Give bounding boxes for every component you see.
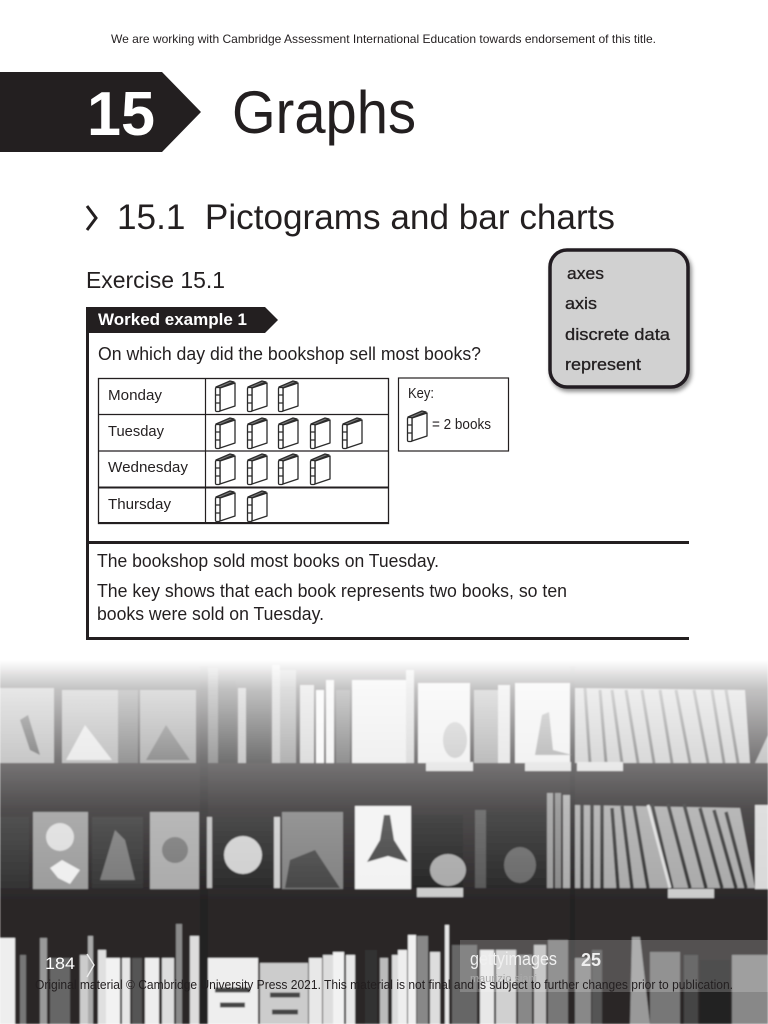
- chapter banner: [0, 72, 201, 152]
- worked example frame: [86, 307, 689, 640]
- pictogram table: [98, 378, 388, 524]
- getty watermark: gettyimages: [470, 949, 557, 969]
- shelf 1 labels: [426, 762, 623, 771]
- worked example tab: [86, 307, 278, 333]
- shelf 2 label: [417, 888, 714, 898]
- getty watermark: [460, 940, 768, 992]
- section heading: 15.1 Pictograms and bar charts: [117, 198, 615, 237]
- worked example tab: Worked example 1: [98, 310, 247, 329]
- row: Thursday: Thursday: [108, 496, 171, 513]
- vocabulary box: [550, 250, 688, 387]
- vocabulary box: axis: [565, 294, 597, 313]
- header notice: We are working with Cambridge Assessment International Education towards endorsement of this title.: [111, 32, 656, 46]
- footer notice: Original material © Cambridge University Press 2021. This material is not final and is subject to further changes prior to publication.: [35, 978, 733, 992]
- row: Tuesday: [108, 418, 362, 448]
- row: Tuesday: Tuesday: [108, 423, 164, 440]
- top shelf books: [0, 665, 768, 763]
- key: [398, 378, 508, 451]
- row: Wednesday: [108, 454, 330, 484]
- getty watermark: maurizio siani: [470, 973, 537, 985]
- getty watermark: 25: [581, 950, 601, 970]
- row: Thursday: [108, 491, 267, 522]
- vocabulary box: represent: [565, 355, 641, 374]
- row: Monday: Monday: [108, 387, 162, 404]
- bottom shelf books: [0, 924, 768, 1024]
- top white fade: [0, 660, 768, 900]
- answer text: [97, 551, 567, 624]
- answer text: The bookshop sold most books on Tuesday.: [97, 551, 439, 571]
- page number: [45, 954, 94, 977]
- vocabulary box: discrete data: [565, 325, 671, 344]
- page number: 184: [45, 954, 75, 973]
- row: Monday: [108, 381, 298, 412]
- bookshelf photo: [0, 660, 768, 1024]
- middle shelf books: [0, 793, 768, 889]
- question: On which day did the bookshop sell most books?: [98, 344, 481, 364]
- answer text: The key shows that each book represents two books, so ten: [97, 581, 567, 601]
- chapter title: Graphs: [232, 79, 416, 146]
- chapter banner: 15: [87, 80, 155, 149]
- answer text: books were sold on Tuesday.: [97, 604, 324, 624]
- row: Wednesday: Wednesday: [108, 459, 188, 476]
- worked example panel: [86, 307, 689, 640]
- key: Key:: [408, 385, 434, 402]
- vocabulary box: axes: [567, 264, 604, 283]
- exercise heading: Exercise 15.1: [86, 267, 225, 293]
- upright dividers: [200, 660, 575, 1024]
- key: = 2 books: [432, 417, 491, 433]
